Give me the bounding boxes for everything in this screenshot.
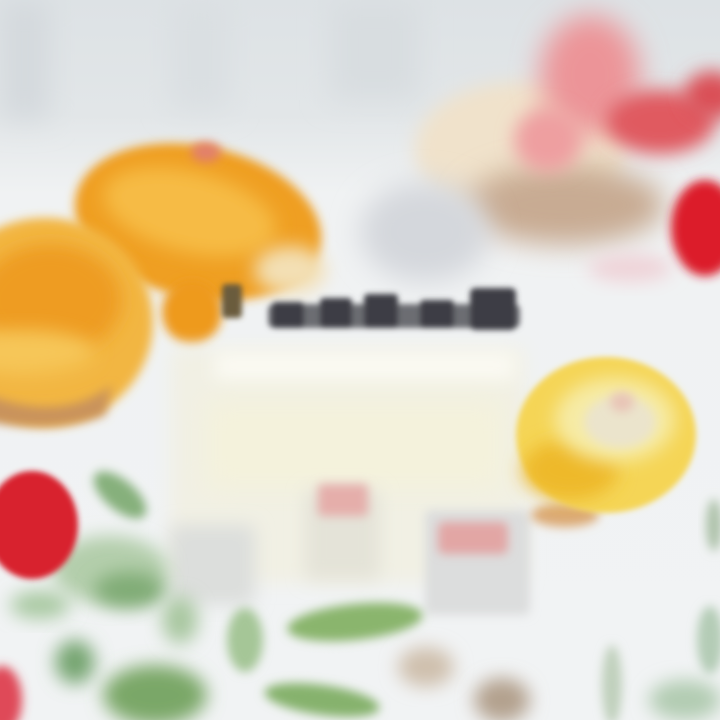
greenery bottom right xyxy=(602,499,720,720)
strawberry bottom corner xyxy=(0,666,22,720)
strawberry lower left xyxy=(0,471,78,579)
small labels on package xyxy=(170,484,530,615)
orange half, left xyxy=(0,218,153,426)
cream package xyxy=(170,348,525,583)
red fruit right edge xyxy=(588,180,720,282)
nuts xyxy=(398,647,530,720)
blurred dark label text xyxy=(222,284,520,330)
grey background object xyxy=(360,182,490,282)
orange half, upper xyxy=(60,122,336,344)
bowl of red fruit xyxy=(415,15,720,245)
green leaves xyxy=(10,463,425,720)
lemon half xyxy=(516,357,696,527)
